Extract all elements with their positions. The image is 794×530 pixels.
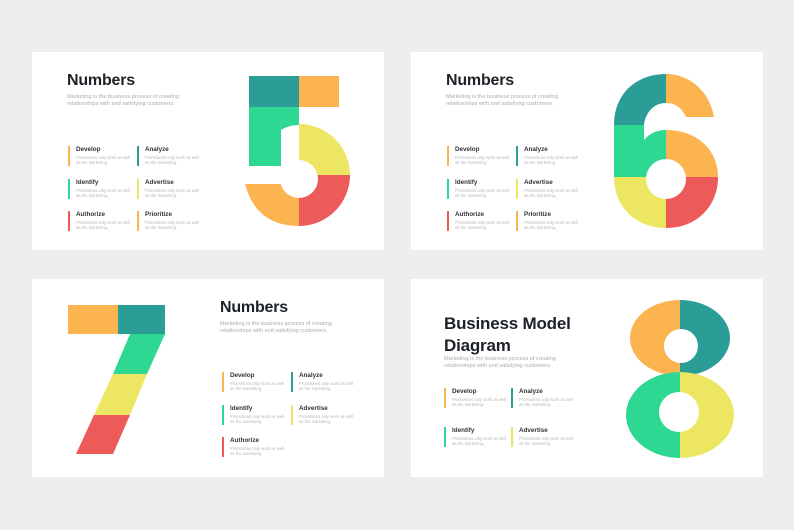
item: authorize: Authorize [455, 211, 484, 218]
item: analyze: Promotions only work as well as the marketing. [524, 155, 578, 165]
item: advertise: Advertise [519, 427, 548, 434]
item: analyze: Analyze [524, 146, 548, 153]
item: prioritize: Prioritize [524, 211, 551, 218]
item: identify: Promotions only work as well as the marketing. [76, 188, 130, 198]
item: authorize: Promotions only work as well as the marketing. [455, 220, 509, 230]
item: analyze: Promotions only work as well as the marketing. [299, 381, 353, 391]
panel: number 5 [32, 52, 384, 250]
panel: number 7 [32, 279, 384, 477]
item: analyze: Analyze [519, 388, 543, 395]
item: develop: Promotions only work as well as the marketing. [455, 155, 509, 165]
item: advertise [511, 427, 573, 447]
item: develop: Develop [76, 146, 100, 153]
item: advertise [516, 179, 578, 199]
item: authorize: Authorize [230, 437, 259, 444]
panel: number 6 [411, 52, 763, 250]
item: develop [68, 146, 130, 166]
item: develop: Promotions only work as well as the marketing. [76, 155, 130, 165]
item: identify [444, 427, 506, 447]
item: authorize: Promotions only work as well as the marketing. [76, 220, 130, 230]
item: authorize [447, 211, 509, 231]
title [444, 314, 571, 355]
item: analyze: Analyze [299, 372, 323, 379]
item: prioritize: Promotions only work as well as the marketing. [145, 220, 199, 230]
title: Numbers [220, 299, 288, 316]
item: identify: Identify [230, 405, 252, 412]
item: advertise: Advertise [145, 179, 174, 186]
item: identify: Promotions only work as well as the marketing. [230, 414, 284, 424]
item: develop [444, 388, 506, 408]
item: analyze [511, 388, 573, 408]
item: identify [222, 405, 284, 425]
item: develop: Develop [455, 146, 480, 153]
item: identify [447, 179, 509, 199]
item: develop: Promotions only work as well as the marketing. [452, 397, 506, 407]
item: authorize [68, 211, 130, 231]
item: develop: Develop [230, 372, 254, 379]
item: analyze: Promotions only work as well as the marketing. [519, 397, 573, 407]
item: identify: Promotions only work as well as the marketing. [452, 436, 506, 446]
item: prioritize: Promotions only work as well as the marketing. [524, 220, 578, 230]
item: analyze: Analyze [145, 146, 169, 153]
title: Business Model [444, 314, 571, 333]
item: develop: Promotions only work as well as the marketing. [230, 381, 284, 391]
subtitle: Marketing is the business process of creating relationships with and satisfying customers. [220, 321, 332, 334]
item: advertise: Promotions only work as well as the marketing. [145, 188, 199, 198]
item: develop: Develop [452, 388, 476, 395]
item: identify: Promotions only work as well as the marketing. [455, 188, 509, 198]
item: advertise: Promotions only work as well as the marketing. [299, 414, 353, 424]
item: analyze [137, 146, 199, 166]
item: advertise: Promotions only work as well as the marketing. [519, 436, 573, 446]
item: identify: Identify [455, 179, 477, 186]
item: analyze [516, 146, 578, 166]
item: advertise [137, 179, 199, 199]
item: identify [68, 179, 130, 199]
item: prioritize [137, 211, 199, 231]
item: authorize: Authorize [76, 211, 105, 218]
item: advertise: Promotions only work as well as the marketing. [524, 188, 578, 198]
item: develop [447, 146, 509, 166]
item: advertise: Advertise [524, 179, 553, 186]
subtitle: Marketing is the business process of creating relationships with and satisfying customers. [67, 94, 179, 107]
item: advertise: Advertise [299, 405, 328, 412]
item: authorize [222, 437, 284, 457]
item: prioritize [516, 211, 578, 231]
panel: number 8 [411, 279, 763, 477]
item: analyze: Promotions only work as well as the marketing. [145, 155, 199, 165]
title: Numbers [446, 72, 514, 89]
subtitle: Marketing is the business process of creating relationships with and satisfying customers. [444, 356, 556, 369]
item: authorize: Promotions only work as well as the marketing. [230, 446, 284, 456]
item: develop [222, 372, 284, 392]
title: Numbers [67, 72, 135, 89]
subtitle: Marketing is the business process of creating relationships with and satisfying customers. [446, 94, 558, 107]
item: prioritize: Prioritize [145, 211, 172, 218]
item: advertise [291, 405, 353, 425]
item: analyze [291, 372, 353, 392]
title: Diagram [444, 336, 511, 355]
item: identify: Identify [452, 427, 474, 434]
item: identify: Identify [76, 179, 98, 186]
